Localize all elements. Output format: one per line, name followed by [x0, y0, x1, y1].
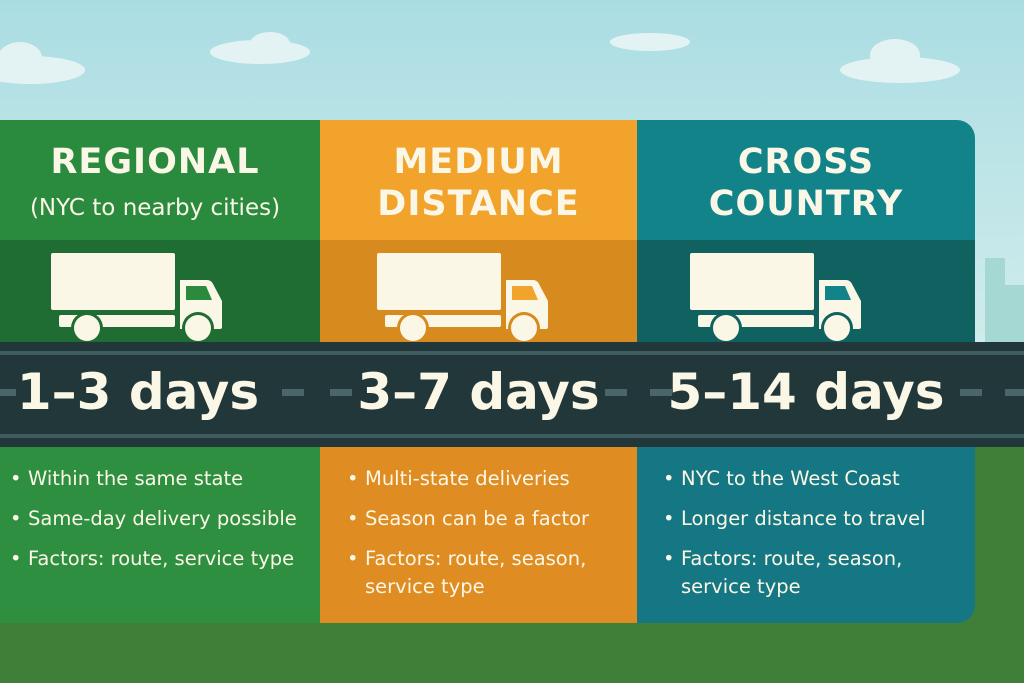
list: medium: Factors: route, season, [365, 547, 586, 570]
panel: cross country [637, 120, 975, 623]
list: regional [12, 467, 297, 570]
list: medium: Multi-state deliveries [365, 467, 570, 490]
icon: truck medium [377, 253, 548, 344]
heading: cross country: COUNTRY [709, 184, 903, 224]
heading: regional [30, 142, 280, 221]
ground [0, 440, 1024, 683]
list: medium: service type [365, 575, 485, 598]
list: regional: Factors: route, service type [28, 547, 294, 570]
list: cross country: service type [681, 575, 801, 598]
heading: medium: DISTANCE [377, 184, 580, 224]
skyline [985, 258, 1005, 348]
road [0, 342, 1024, 447]
list: regional: Same-day delivery possible [28, 507, 297, 530]
icon: truck regional [51, 253, 222, 344]
list: medium [350, 467, 589, 598]
heading: regional: (NYC to nearby cities) [30, 195, 280, 221]
time: regional: 1–3 days [17, 363, 259, 421]
heading: cross country: CROSS [738, 142, 874, 182]
clouds [0, 32, 960, 84]
panel: regional [0, 120, 320, 623]
list: cross country [666, 467, 926, 598]
heading: medium: MEDIUM [393, 142, 564, 182]
heading: medium [377, 142, 580, 224]
icon: truck cross country [690, 253, 861, 344]
heading: regional: REGIONAL [50, 142, 260, 182]
list: medium: Season can be a factor [365, 507, 589, 530]
list: cross country: Factors: route, season, [681, 547, 902, 570]
time: cross country: 5–14 days [667, 363, 945, 421]
list: cross country: Longer distance to travel [681, 507, 926, 530]
trucks [51, 253, 861, 341]
list: regional: Within the same state [28, 467, 243, 490]
list: cross country: NYC to the West Coast [681, 467, 900, 490]
panel: medium [320, 120, 637, 623]
heading: cross country [709, 142, 903, 224]
time: medium: 3–7 days [357, 363, 600, 421]
